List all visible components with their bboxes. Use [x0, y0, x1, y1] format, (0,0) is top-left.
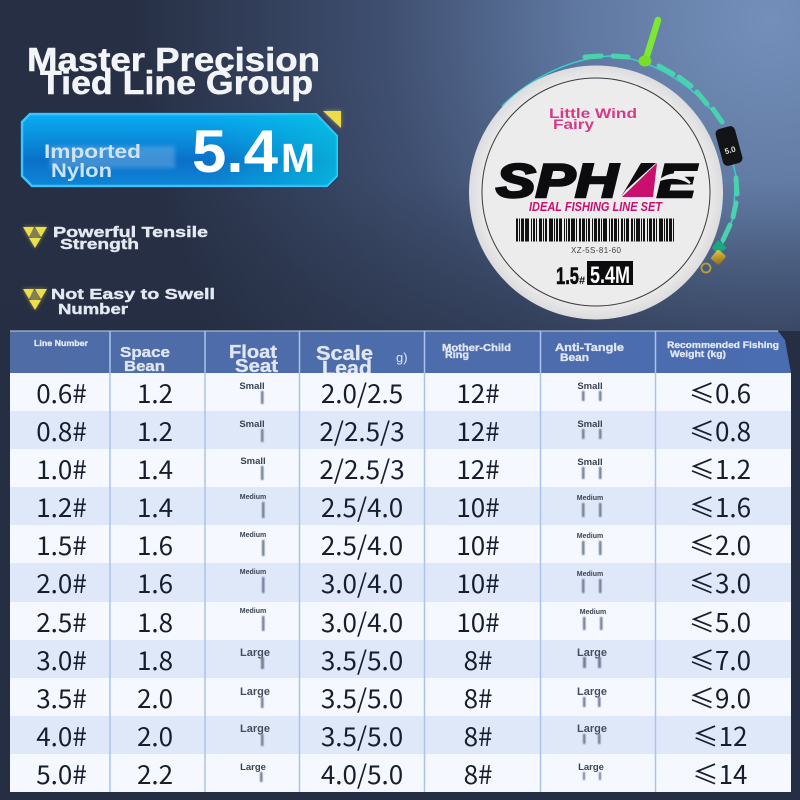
row 1.5#: ≤2.0	[689, 526, 751, 563]
reel: barcode	[516, 218, 676, 242]
reel: logo: SPH	[496, 154, 619, 207]
bullet: not easy to swell	[23, 286, 215, 318]
row 5.0#: Large	[578, 762, 604, 773]
row 0.8#	[10, 411, 791, 449]
row 3.5#: 8#	[464, 679, 492, 716]
row 2.5#: 1.8	[137, 603, 173, 640]
row 5.0#	[10, 754, 791, 792]
table header: g)	[396, 350, 408, 365]
table header: Anti-Tangle	[555, 342, 624, 354]
row 1.0#: 1.0#	[36, 450, 87, 487]
badge: 5.4M imported nylon: Nylon	[51, 161, 112, 182]
row 1.2#: 1.2#	[36, 488, 87, 525]
row 1.2#: Medium	[240, 494, 266, 501]
badge: 5.4M imported nylon: Imported	[44, 142, 141, 163]
title: Tied Line Group	[40, 64, 313, 101]
row 5.0#: 4.0/5.0	[321, 755, 403, 792]
row 0.8#: 2/2.5/3	[319, 412, 405, 449]
row 2.5#: Medium	[240, 608, 266, 615]
reel: logo: E	[657, 154, 698, 207]
row 2.5#	[10, 602, 791, 640]
row 1.5#	[10, 525, 791, 563]
row 3.5#: 3.5#	[36, 679, 87, 716]
row 4.0#: ≤12	[693, 717, 747, 754]
row 1.2#: 1.4	[137, 488, 173, 525]
row 5.0#: 2.2	[137, 755, 173, 792]
title	[27, 41, 320, 101]
row 1.5#: Medium	[577, 533, 603, 540]
row 1.2#: Medium	[577, 495, 603, 502]
row 1.5#: 1.6	[137, 526, 173, 563]
row 2.0#	[10, 563, 791, 602]
reel: size label: #	[579, 275, 585, 287]
table header: Seat	[235, 356, 278, 376]
row 3.0#: 3.5/5.0	[321, 641, 403, 678]
row 0.6#	[10, 373, 791, 411]
sinker: 5.0	[724, 144, 737, 156]
row 3.0#: Large	[240, 647, 270, 659]
row 2.0#: Medium	[577, 571, 603, 578]
row 3.5#: 3.5/5.0	[321, 679, 403, 716]
table header: Bean	[124, 358, 165, 375]
reel: brand note: Fairy	[553, 116, 594, 132]
row 1.0#	[10, 449, 791, 487]
table header: Scale	[316, 343, 373, 365]
row 0.6#: Small	[577, 381, 603, 392]
row 1.5#: 2.5/4.0	[321, 526, 403, 563]
reel: size label	[556, 261, 633, 290]
reel: brand note: Little Wind	[549, 105, 637, 121]
row 4.0#: 3.5/5.0	[321, 717, 403, 754]
row 4.0#: Large	[240, 723, 270, 735]
row 2.5#: 2.5#	[36, 603, 87, 640]
row 4.0#: Large	[577, 723, 607, 735]
bullet: not easy to swell: Number	[58, 301, 128, 318]
background glow	[0, 0, 800, 331]
bullet: powerful tensile strength: Powerful Tensile	[53, 224, 208, 241]
row 0.8#: ≤0.8	[689, 412, 751, 449]
row 1.2#	[10, 487, 791, 525]
row 3.0#: 3.0#	[36, 641, 87, 678]
row 3.5#	[10, 678, 791, 716]
row 0.6#: 1.2	[137, 374, 173, 411]
row 0.8#: Small	[577, 419, 603, 430]
row 3.0#: 1.8	[137, 641, 173, 678]
row 1.5#: Medium	[240, 532, 266, 539]
row 2.5#: 3.0/4.0	[321, 603, 403, 640]
row 1.2#: 2.5/4.0	[321, 488, 403, 525]
fishing line rig	[502, 20, 737, 272]
row 2.0#: 2.0#	[36, 564, 87, 601]
row 3.5#: Large	[577, 686, 607, 698]
row 0.6#: 2.0/2.5	[321, 374, 403, 411]
row 2.5#: ≤5.0	[689, 603, 751, 640]
row 1.0#: ≤1.2	[689, 450, 751, 487]
badge: 5.4M imported nylon: 5.4	[192, 118, 279, 185]
row 0.6#: 12#	[456, 374, 500, 411]
row 1.0#: Small	[240, 456, 266, 467]
row 3.5#: Large	[240, 686, 270, 698]
row 5.0#: Large	[240, 762, 266, 773]
row 1.5#: 10#	[456, 526, 500, 563]
icon: yellow corner triangle	[323, 111, 341, 128]
row 3.0#	[10, 640, 791, 678]
row 2.5#: Medium	[580, 609, 606, 616]
row 2.0#: 1.6	[137, 564, 173, 601]
row 5.0#: 8#	[464, 755, 492, 792]
bullet: powerful tensile strength: Strength	[60, 236, 139, 253]
row 0.8#: 1.2	[137, 412, 173, 449]
row 2.0#: 10#	[456, 564, 500, 601]
row 5.0#: 5.0#	[36, 755, 87, 792]
row 3.0#: 8#	[464, 641, 492, 678]
row 3.5#: 2.0	[137, 679, 173, 716]
bullet: powerful tensile strength	[23, 224, 208, 253]
reel: tagline: IDEAL FISHING LINE SET	[529, 200, 663, 214]
table header: Mother-Child	[442, 343, 511, 354]
row 0.6#: ≤0.6	[689, 374, 751, 411]
sinker	[714, 125, 744, 167]
row 0.8#: 12#	[456, 412, 500, 449]
row 2.0#: ≤3.0	[689, 564, 751, 601]
table header	[10, 331, 791, 380]
row 1.0#: 2/2.5/3	[319, 450, 405, 487]
table header: Weight (kg)	[670, 349, 726, 360]
background fade	[0, 180, 800, 331]
row 0.8#: 0.8#	[36, 412, 87, 449]
row 1.2#: 10#	[456, 488, 500, 525]
row 1.0#: Small	[577, 457, 603, 468]
row 1.2#: ≤1.6	[689, 488, 751, 525]
table header: Lead	[322, 358, 372, 380]
table header: Line Number	[34, 339, 88, 348]
table header: Float	[229, 342, 277, 362]
reel: logo	[496, 154, 698, 207]
row 2.0#: Medium	[240, 569, 266, 576]
row 1.5#: 1.5#	[36, 526, 87, 563]
table header: Recommended Fishing	[667, 340, 779, 351]
row 2.5#: 10#	[456, 603, 500, 640]
row 0.6#: 0.6#	[36, 374, 87, 411]
reel	[469, 66, 723, 320]
row 1.0#: 1.4	[137, 450, 173, 487]
title: Master Precision	[27, 41, 320, 78]
row 0.8#: Small	[239, 419, 265, 430]
row 4.0#: 2.0	[137, 717, 173, 754]
row 4.0#: 8#	[464, 717, 492, 754]
reel: code: XZ-5S-81-60	[571, 246, 622, 255]
table header: Ring	[445, 350, 469, 361]
row 1.0#: 12#	[456, 450, 500, 487]
table header: Bean	[560, 352, 589, 364]
row 5.0#: ≤14	[693, 755, 747, 792]
bullet: not easy to swell: Not Easy to Swell	[51, 286, 215, 303]
reel: size label: 1.5	[556, 263, 579, 290]
badge: 5.4M imported nylon	[20, 112, 339, 188]
table	[10, 331, 791, 792]
row 3.5#: ≤9.0	[689, 679, 751, 716]
column dividers	[110, 331, 656, 792]
row 4.0#	[10, 716, 791, 754]
row 3.0#: Large	[577, 647, 607, 659]
row 3.0#: ≤7.0	[689, 641, 751, 678]
badge: 5.4M imported nylon: M	[281, 135, 315, 181]
reel: size label: 5.4M	[590, 262, 630, 289]
row 4.0#: 4.0#	[36, 717, 87, 754]
row 2.0#: 3.0/4.0	[321, 564, 403, 601]
row 0.6#: Small	[239, 381, 265, 392]
table header: Space	[120, 344, 170, 361]
reel: brand note	[549, 105, 637, 132]
